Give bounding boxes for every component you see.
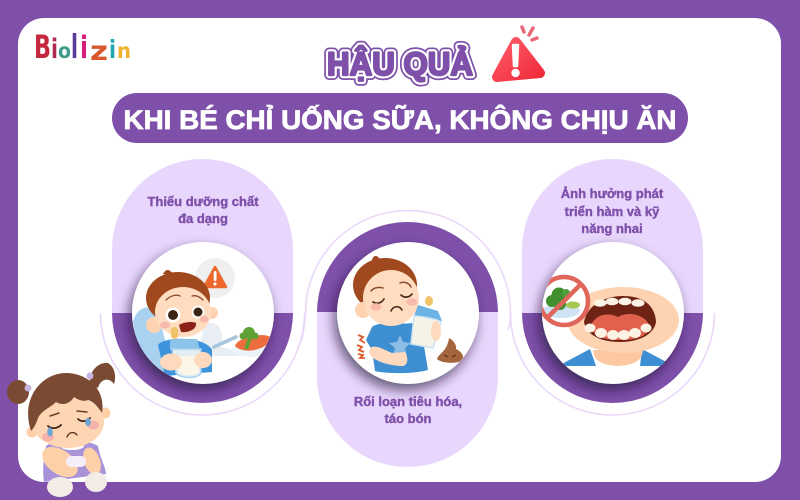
- caption 2: táo bón: [385, 411, 432, 426]
- caption 3: Ảnh hưởng phát: [561, 186, 664, 201]
- logo: Biolizin: z: [90, 36, 108, 67]
- title: HẬU QUẢ: HẬU QUẢ: [327, 46, 473, 82]
- logo: Biolizin: i: [80, 30, 88, 66]
- logo: Biolizin: i: [109, 35, 116, 64]
- character: sad little girl: [7, 363, 115, 497]
- logo: Biolizin: B: [34, 28, 51, 66]
- circle 3 background: [542, 242, 684, 384]
- logo: Biolizin: n: [117, 39, 131, 63]
- logo: Biolizin: i: [51, 34, 58, 65]
- caption 3: năng nhai: [581, 221, 643, 236]
- subtitle banner: [112, 93, 688, 143]
- illustration: baby with bottle and plate: [133, 258, 272, 386]
- caption 3: triển hàm và kỹ: [565, 204, 660, 219]
- title: HẬU QUẢ: HẬU QUẢ: [327, 46, 473, 82]
- caption 2: Rối loạn tiêu hóa,: [354, 394, 462, 409]
- illustration: baby with stomach ache: [353, 256, 463, 373]
- logo: Biolizin: [34, 27, 131, 67]
- caption 1: Thiếu dưỡng chất: [147, 194, 259, 209]
- circle 1 background: [132, 242, 274, 384]
- circle 2 background: [337, 242, 479, 384]
- subtitle banner: KHI BÉ CHỈ UỐNG SỮA, KHÔNG CHỊU ĂN: [124, 103, 676, 135]
- logo: Biolizin: l: [71, 27, 78, 66]
- panel: rối loạn tiêu hóa: [301, 210, 510, 467]
- title: HẬU QUẢ: HẬU QUẢ: [327, 46, 473, 82]
- illustration: open mouth and no-food sign: [539, 276, 679, 366]
- logo: Biolizin: o: [58, 39, 71, 63]
- caption 1: đa dạng: [178, 211, 228, 226]
- panel: thiếu dưỡng chất: [100, 159, 304, 415]
- icon: red warning triangle: [497, 27, 540, 77]
- panel: ảnh hưởng hàm và kỹ năng nhai: [510, 159, 714, 415]
